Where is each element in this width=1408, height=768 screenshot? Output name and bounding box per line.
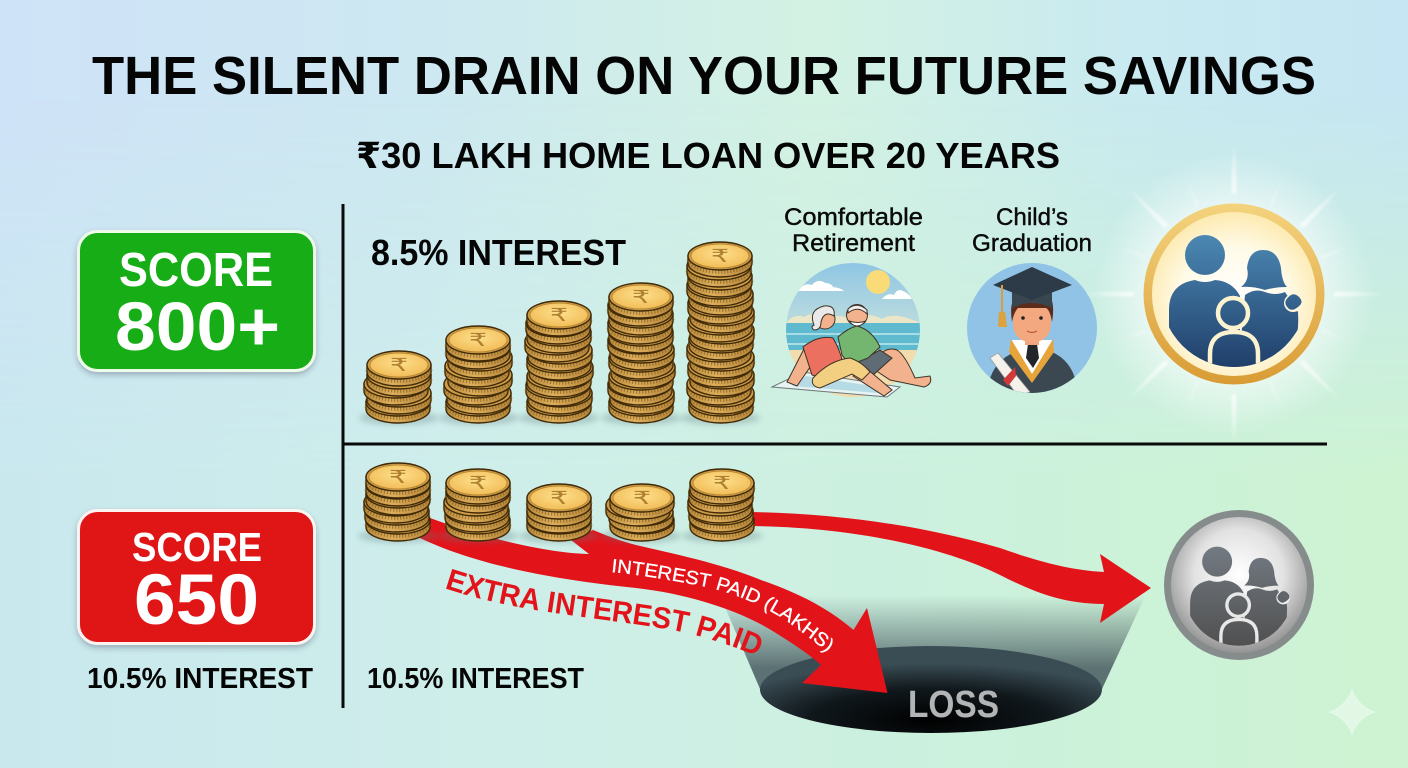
coin stack 4	[608, 283, 675, 423]
coin stack 3	[525, 301, 593, 423]
coin stack 4: ₹	[632, 287, 650, 307]
hole: loss pit	[760, 646, 1102, 733]
coin stack 2	[444, 469, 510, 541]
man figure	[838, 304, 931, 387]
icon: radiant family medallion	[1084, 144, 1384, 444]
badge: score 800+: 800+	[115, 288, 280, 365]
coin stack 1: ₹	[389, 467, 407, 487]
label: child's graduation: Child’s	[996, 204, 1068, 231]
label: comfortable retirement	[784, 204, 923, 257]
label: 10.5% interest in chart: 10.5% INTEREST	[367, 663, 584, 695]
label: child's graduation: Graduation	[972, 230, 1092, 257]
label: child's graduation	[972, 204, 1092, 257]
coin stack 3	[527, 484, 591, 541]
icon: sparkle watermark	[1328, 688, 1376, 736]
coin stack 3: ₹	[550, 305, 568, 325]
arrow: interest drain into pit	[420, 518, 888, 693]
coin stack 3: ₹	[550, 488, 568, 508]
beach blanket	[772, 372, 900, 397]
icon: faded family medallion	[1164, 510, 1314, 660]
coin stack 1	[364, 463, 430, 541]
badge: score 800+: SCORE	[119, 244, 273, 297]
coin stack 2	[444, 326, 512, 423]
hole: funnel shadow	[722, 575, 1155, 689]
coin stack 2: ₹	[469, 330, 487, 350]
label: extra interest paid: EXTRA INTEREST PAID	[446, 569, 762, 654]
woman figure	[787, 306, 892, 396]
label: 8.5% interest: 8.5% INTEREST	[371, 232, 626, 273]
title: THE SILENT DRAIN ON YOUR FUTURE SAVINGS	[92, 46, 1316, 106]
label: loss: LOSS	[908, 684, 999, 726]
icon: retired couple on beach	[772, 263, 931, 400]
label: 10.5% interest under badge: 10.5% INTEREST	[87, 663, 313, 695]
sun glow	[1094, 154, 1374, 434]
badge: score 650: SCORE	[132, 524, 262, 570]
badge: score 650: 650	[134, 561, 259, 640]
label: comfortable retirement: Comfortable	[784, 204, 923, 231]
coin stack 1	[364, 351, 431, 423]
subtitle: ₹30 LAKH HOME LOAN OVER 20 YEARS	[356, 135, 1060, 176]
label: comfortable retirement: Retirement	[792, 230, 915, 257]
gray family silhouette	[1190, 547, 1290, 649]
icon: graduate	[967, 263, 1097, 396]
coin stack 2: ₹	[469, 473, 487, 493]
gold ring	[1144, 204, 1324, 384]
coin stack 1: ₹	[390, 355, 408, 375]
coin stack 4: ₹	[633, 488, 651, 508]
arrow label: interest paid (lakhs): INTEREST PAID (LAKHS)	[612, 559, 833, 653]
chart: growing coin stacks	[359, 242, 760, 425]
badge: score 800+	[78, 232, 314, 370]
coin stack 5: ₹	[713, 473, 731, 493]
coin stack 5	[687, 242, 754, 423]
coin stack 5	[688, 469, 754, 541]
coin stack 5: ₹	[711, 246, 729, 266]
badge: score 650	[78, 510, 314, 644]
family silhouette	[1169, 235, 1302, 372]
arrow: remaining savings to family	[750, 512, 1151, 623]
axis lines	[343, 204, 1327, 708]
coin stack 4	[606, 484, 674, 541]
sun rays	[1084, 144, 1384, 444]
coin stacks: high interest row	[358, 463, 762, 543]
